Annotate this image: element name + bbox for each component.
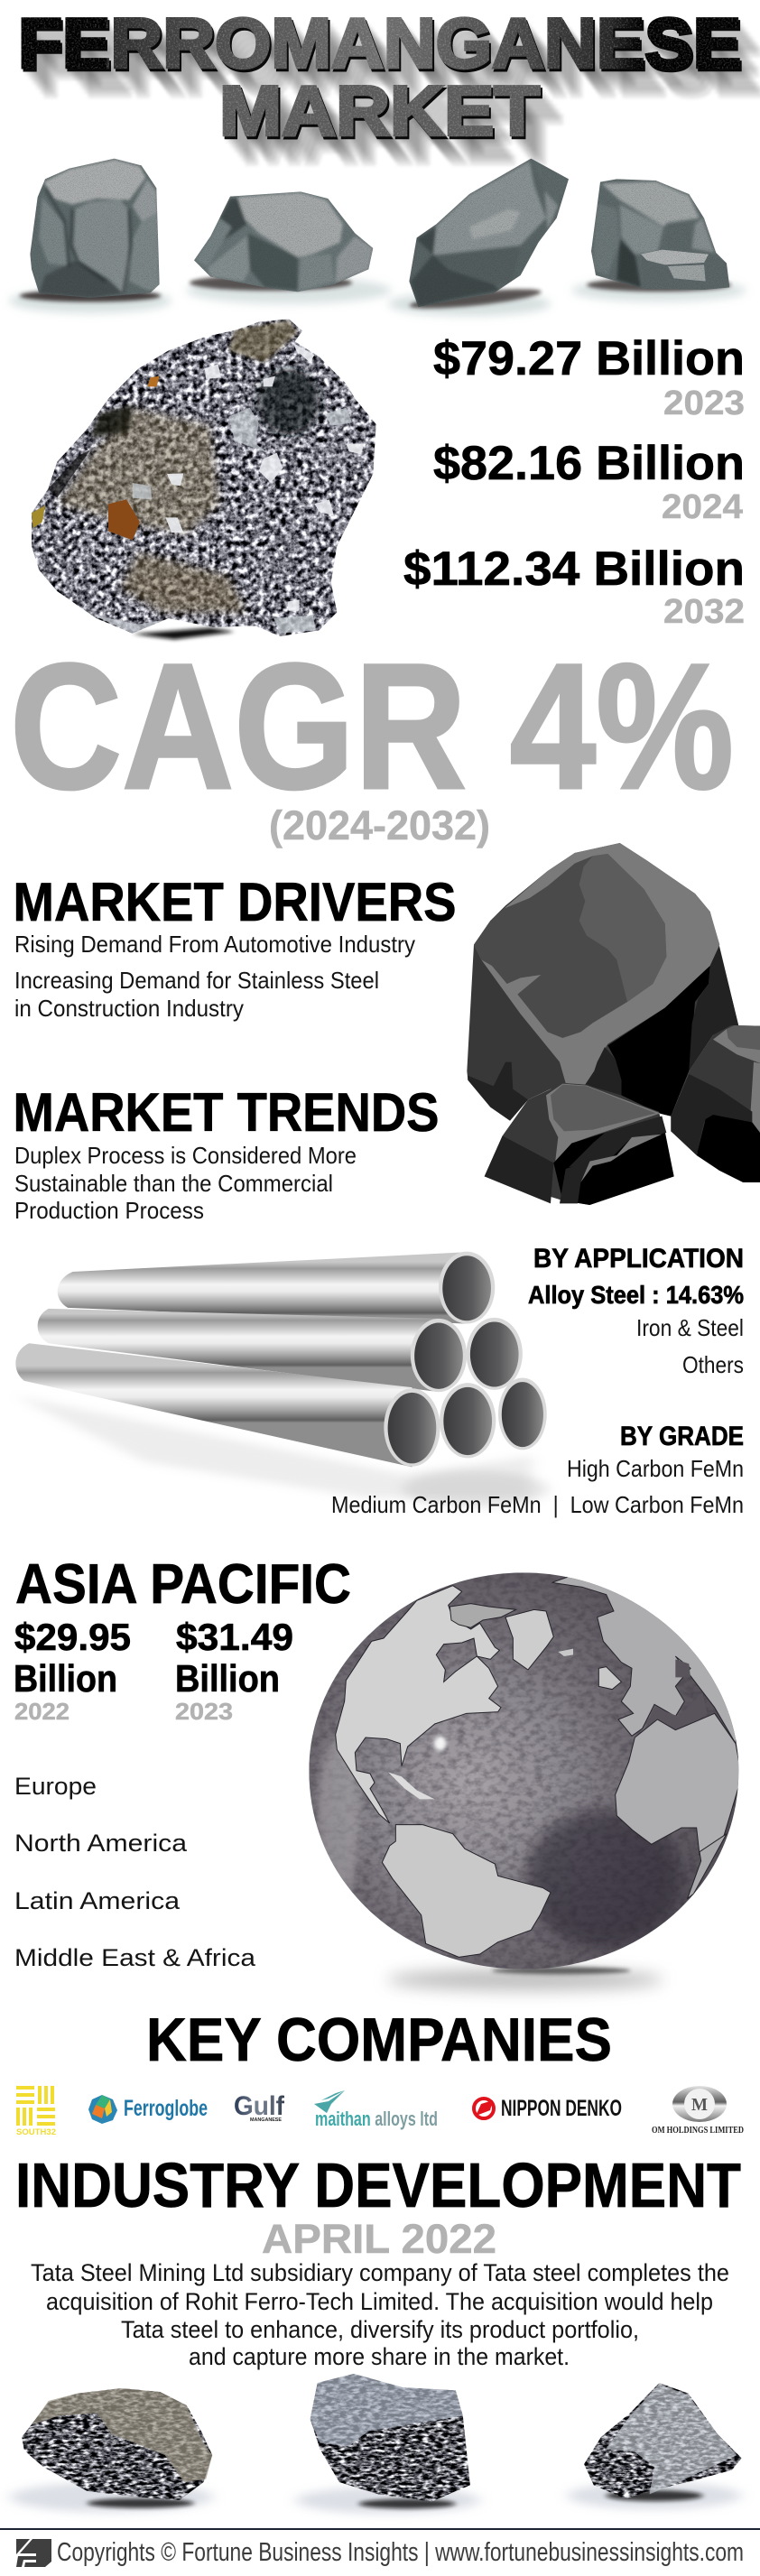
pipe: middle right — [467, 1318, 523, 1390]
continent: arctic islands — [450, 1604, 516, 1627]
pipe: bottom left — [15, 1343, 440, 1467]
stat: 2032 market value — [403, 542, 745, 631]
CAGR period: (2024-2032) — [269, 802, 490, 848]
panel: by application: BY APPLICATION — [533, 1244, 744, 1274]
list: other regions: Europe — [14, 1773, 97, 1800]
icon: grey rocks right pair — [388, 156, 746, 316]
icon: rock 1 — [9, 155, 171, 313]
panel: by application: Alloy Steel : 14.63% — [528, 1281, 744, 1309]
logo: Maithan Alloys: maithan alloys ltd — [315, 2108, 438, 2130]
stat: 2032 market value: 2032 — [663, 593, 745, 631]
continent: eurasia — [552, 1575, 742, 1744]
stat: 2023 market value: 2023 — [663, 385, 745, 422]
continent: north america — [336, 1586, 501, 1823]
title: MARKET — [219, 70, 540, 150]
panel: by application: Others — [682, 1351, 744, 1378]
text: drivers list — [14, 931, 415, 1022]
pipe: top — [58, 1252, 495, 1324]
list: other regions: Middle East & Africa — [14, 1944, 256, 1971]
stat: 2023 market value — [433, 332, 745, 422]
text: development description: and capture more share in the market. — [189, 2343, 570, 2370]
logo: Gulf Manganese: Gulf — [234, 2091, 285, 2121]
text: drivers list: in Construction Industry — [14, 995, 244, 1022]
text: trends list — [14, 1142, 357, 1224]
image: stack of steel pipes — [14, 1252, 548, 1507]
stat: asia pacific 2023: Billion — [175, 1657, 280, 1700]
text: development description: Tata steel to enhance, diversify its product portfolio, — [121, 2316, 639, 2343]
stat: 2023 market value: $79.27 Billion — [433, 332, 745, 385]
panel: by application — [528, 1244, 744, 1378]
image: three bottom rocks — [10, 2374, 742, 2514]
logo: South32 — [16, 2086, 56, 2136]
image: rock left — [10, 2388, 213, 2512]
icon: main coal rock — [467, 843, 738, 1121]
continent: caribbean — [388, 1772, 435, 1799]
stat: 2024 market value — [433, 437, 745, 526]
stat: 2024 market value: 2024 — [662, 488, 743, 526]
logo: Ferroglobe — [88, 2095, 208, 2124]
text: drivers list: Rising Demand From Automotive Industry — [14, 931, 415, 958]
stat: asia pacific 2022: 2022 — [14, 1698, 70, 1725]
icon: dark coal rocks — [467, 843, 760, 1205]
heading: market trends: MARKET TRENDS — [13, 1082, 439, 1143]
image: rock right — [567, 2383, 742, 2509]
panel: by grade — [331, 1422, 744, 1518]
list: other regions: North America — [14, 1830, 188, 1857]
list: other regions: Latin America — [14, 1887, 181, 1914]
icon: footer logo — [16, 2539, 51, 2567]
heading: market drivers: MARKET DRIVERS — [13, 872, 457, 932]
stat: asia pacific 2023 — [175, 1616, 293, 1725]
logo: OM Holdings — [652, 2086, 744, 2136]
text: development description: Tata Steel Mining Ltd subsidiary company of Tata steel completes the — [31, 2259, 729, 2286]
icon: rock 4 — [571, 178, 746, 301]
text: development description: acquisition of Rohit Ferro-Tech Limited. The acquisition would help — [46, 2288, 713, 2315]
icon: small front rock — [485, 1084, 674, 1205]
image: globe painted on an egg — [302, 1566, 747, 1990]
pipe: middle left — [38, 1309, 467, 1392]
image: large ferromanganese ore — [27, 314, 379, 639]
title — [18, 4, 741, 150]
sea: mediterranean and black sea — [645, 1693, 706, 1729]
text: trends list: Sustainable than the Commercial — [14, 1170, 333, 1197]
continent: greenland — [505, 1609, 553, 1670]
ore bright crystal facets — [165, 343, 364, 611]
heading: key companies: KEY COMPANIES — [146, 2006, 612, 2074]
panel: by application: Iron & Steel — [636, 1314, 744, 1341]
logo: Maithan Alloys — [314, 2090, 438, 2130]
stat: asia pacific 2023: $31.49 — [176, 1616, 293, 1658]
stat: 2032 market value: $112.34 Billion — [403, 542, 745, 596]
stat: asia pacific 2022: Billion — [14, 1657, 117, 1700]
logo: Ferroglobe: Ferroglobe — [124, 2096, 208, 2121]
icon: rock 3 — [388, 156, 570, 316]
continent: africa — [616, 1713, 742, 1855]
text: trends list: Production Process — [14, 1197, 204, 1224]
text: trends list: Duplex Process is Considered More — [14, 1142, 357, 1169]
image: rock middle — [296, 2374, 480, 2514]
logo: Nippon Denko — [474, 2096, 622, 2121]
list: other regions — [14, 1773, 256, 1971]
date: april 2022: APRIL 2022 — [262, 2216, 496, 2262]
icon: grey rocks left pair — [9, 155, 391, 313]
logo: Gulf Manganese: MANGANESE — [250, 2117, 283, 2123]
stat: asia pacific 2022: $29.95 — [14, 1616, 131, 1658]
pipe: bottom right — [498, 1377, 547, 1450]
continent: south america — [382, 1825, 551, 1957]
continent: southern rim — [688, 1834, 727, 1898]
panel: by grade: High Carbon FeMn — [567, 1455, 744, 1482]
stat: asia pacific 2022 — [14, 1616, 131, 1725]
continent: iceland — [558, 1649, 573, 1656]
title: FERROMANGANESE — [18, 4, 741, 83]
stat: 2024 market value: $82.16 Billion — [433, 437, 745, 490]
pipe: bottom middle — [440, 1383, 496, 1458]
stat: asia pacific 2023: 2023 — [175, 1698, 233, 1725]
text: drivers list: Increasing Demand for Stainless Steel — [14, 967, 379, 994]
text: development description — [31, 2259, 729, 2370]
icon: rock 2 — [187, 188, 391, 304]
continent: united kingdom — [598, 1667, 621, 1690]
logo: South32: SOUTH32 — [16, 2127, 56, 2136]
footer divider — [0, 2528, 760, 2530]
logo: OM Holdings: M — [691, 2095, 708, 2115]
heading: asia pacific: ASIA PACIFIC — [15, 1553, 351, 1616]
logo: Nippon Denko: NIPPON DENKO — [501, 2096, 622, 2121]
panel: by grade: BY GRADE — [620, 1422, 744, 1451]
icon: right cropped rock — [671, 1025, 760, 1182]
